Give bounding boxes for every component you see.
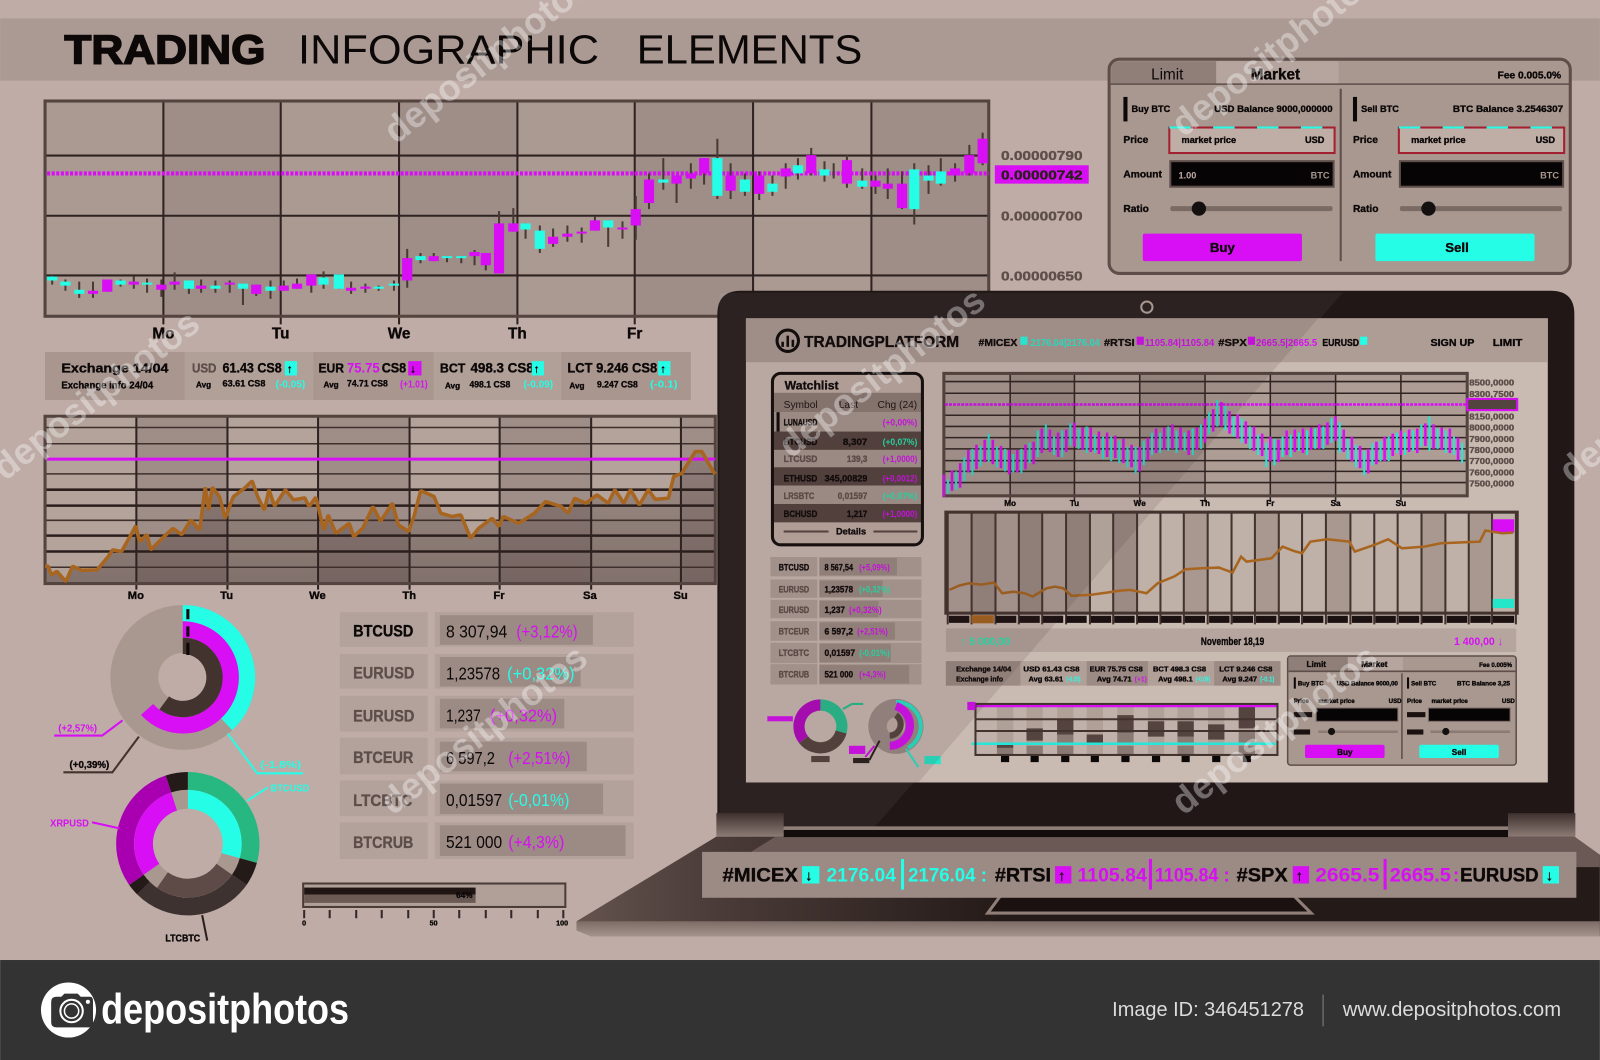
ticker band: 2176.04: [827, 864, 896, 886]
exchange info strip: BCT: [440, 360, 465, 375]
day labels: main chart: [152, 326, 642, 343]
mini trade panel: Buy BTC: [1298, 681, 1324, 688]
small info strip: Avg 498.1: [1158, 676, 1193, 684]
camera: [1141, 301, 1152, 313]
progress gauge: 100: [556, 919, 568, 927]
watchlist: (+0,07%): [883, 491, 917, 501]
screen ticker: [979, 337, 1523, 349]
watchlist: 8,307: [843, 437, 867, 447]
buy form: Buy: [1210, 240, 1236, 255]
row: EURUSD 2: 1,237: [446, 705, 481, 725]
watchlist: 139,3: [847, 454, 867, 464]
row: LTCBTC: (-0,01%): [508, 790, 569, 810]
day labels: area chart: We: [309, 590, 326, 602]
watchlist: ETHUSD: [784, 474, 818, 484]
watchlist: [772, 373, 922, 545]
small info strip: Avg 9.247: [1222, 676, 1257, 684]
screen chart axis: 7700,0000: [1469, 457, 1515, 466]
exchange info strip: ↑: [287, 363, 292, 375]
ticker band: EURUSD: [1460, 864, 1539, 886]
laptop lid: [717, 291, 1574, 828]
ticker band: ↓: [805, 868, 812, 884]
ticker band: 2665.5: [1390, 864, 1451, 886]
row: EURUSD: EURUSD: [353, 664, 415, 682]
ticker band: #RTSI: [995, 864, 1051, 886]
screen chart axis: 8500,0000: [1469, 379, 1515, 388]
sell form: market price: [1411, 135, 1466, 145]
small info strip: Exchange info: [956, 676, 1004, 684]
ticker band: #MICEX: [722, 864, 798, 886]
row: BTCRUB: 521 000: [446, 832, 502, 852]
platform logo: TRADINGPLATFORM: [804, 334, 959, 351]
screen ticker: #MICEX: [979, 338, 1018, 349]
ticker band: ↑: [1058, 868, 1065, 884]
watchlist: LRSBTC: [784, 491, 815, 501]
row: BTCEUR: BTCEUR: [353, 749, 414, 767]
screen chart axis: 7800,0000: [1469, 446, 1515, 455]
exchange info strip: Avg: [569, 382, 585, 391]
screen ticker: LIMIT: [1493, 338, 1523, 349]
day labels: main chart: Tu: [272, 326, 289, 343]
small info strip: (-0.09): [1196, 676, 1211, 684]
row: BTCEUR: (+2,51%): [508, 748, 570, 768]
row: BTCRUB: (+4,3%): [508, 832, 564, 852]
exchange info strip: [45, 352, 691, 400]
watchlist: 345,00829: [824, 474, 867, 484]
ticker band: ↑: [1296, 868, 1303, 884]
buy form: Price: [1123, 135, 1149, 146]
screen chart axis: [1467, 379, 1517, 489]
screen glare: [746, 318, 1318, 783]
ticker band: 2665.5: [1315, 864, 1380, 886]
watermarks: depositphotos: [373, 636, 595, 822]
screen chart axis: 8150,0000: [1469, 412, 1515, 421]
donut 2 labels: BTCUSD: [271, 784, 309, 795]
trade panel: [1109, 59, 1570, 273]
screen candlestick chart: Su: [1396, 499, 1406, 508]
footer: [0, 960, 1600, 1060]
footer logo: [41, 982, 349, 1038]
sell form: Price: [1353, 135, 1378, 146]
ticker band: :: [1223, 864, 1230, 886]
buy form: 1.00: [1178, 171, 1196, 181]
exchange info strip: 61.43 CS8: [223, 360, 282, 376]
screen ticker: SIGN UP: [1430, 338, 1475, 349]
tabs: Market: [1251, 67, 1300, 84]
sell form: Amount: [1353, 170, 1392, 181]
row: EURUSD 2: [340, 696, 634, 731]
laptop screen: [746, 318, 1548, 783]
exchange info strip: Avg: [324, 381, 339, 390]
ticker band: :: [981, 864, 987, 886]
exchange info strip: Avg: [196, 381, 211, 390]
mini price table: (+0,32%): [859, 585, 890, 595]
row: BTCRUB: BTCRUB: [353, 834, 414, 852]
mini trade panel: market price: [1432, 698, 1468, 705]
day labels: area chart: Su: [673, 590, 688, 602]
donut chart 1: [54, 605, 303, 773]
tabs: Fee 0.005.0%: [1498, 71, 1561, 82]
screen ticker: EURUSD: [1322, 338, 1359, 349]
ticker band: 1105.84: [1155, 864, 1218, 886]
mini price table: 6 597,2: [824, 627, 853, 637]
buy form: Amount: [1123, 170, 1162, 181]
exchange info strip: 63.61 CS8: [223, 379, 265, 389]
day labels: main chart: Mo: [152, 326, 174, 343]
screen chart axis: 7900,0000: [1469, 435, 1515, 444]
exchange info strip: 75.75: [347, 360, 380, 376]
mini trade panel: USD Balance 9000,00: [1337, 681, 1398, 688]
buy form: [1123, 97, 1335, 261]
watermarks: depositphotos: [1163, 636, 1385, 822]
sell form: USD: [1536, 135, 1555, 145]
mini trade panel: market price: [1318, 698, 1355, 705]
screen candlestick chart: Mo: [1004, 499, 1016, 508]
platform logo: [777, 330, 959, 351]
watchlist: 1,217: [847, 509, 867, 519]
title: [64, 26, 862, 72]
watchlist: (+1,0000): [883, 454, 917, 464]
row: EURUSD 2: EURUSD: [353, 707, 415, 725]
screen ticker: 1105.84|1105.84: [1145, 338, 1214, 349]
price axis labels: 0.00000650: [1001, 269, 1083, 284]
mini price table: 1,237: [824, 605, 845, 615]
exchange info strip: ↑: [534, 363, 539, 375]
screen candlestick chart: [944, 373, 1517, 508]
ticker band: [702, 852, 1576, 898]
buy form: Ratio: [1123, 204, 1149, 215]
price axis labels: 0.00000742: [1001, 168, 1083, 183]
watchlist: Watchlist: [785, 379, 839, 393]
image id: Image ID: 346451278: [1112, 999, 1304, 1021]
price table: [340, 612, 634, 859]
day labels: main chart: Fr: [627, 326, 642, 343]
mini price table: (-0,01%): [859, 648, 890, 658]
mini trade panel: Fee 0.005%: [1479, 662, 1513, 669]
small info strip: [946, 661, 1281, 686]
price axis labels: [995, 148, 1089, 284]
exchange info strip: (-0.09): [524, 380, 553, 391]
title: ELEMENTS: [637, 26, 862, 72]
small info strip: Avg 74.71: [1097, 676, 1132, 684]
screen chart axis: 7500,0000: [1469, 480, 1515, 489]
exchange info strip: Exchange info 24/04: [61, 381, 153, 392]
donut 2 labels: XRPUSD: [50, 818, 89, 829]
date strip: ↑ 5 000,00: [961, 636, 1010, 648]
screen chart axis: 7600,0000: [1469, 468, 1515, 477]
small info strip: (-0.1): [1260, 676, 1275, 684]
ticker band: #SPX: [1237, 864, 1288, 886]
buy form: BTC: [1311, 171, 1330, 181]
watermarks: depositphotos: [771, 279, 993, 465]
day labels: area chart: Mo: [128, 590, 144, 602]
mini trade panel: Market: [1361, 660, 1388, 669]
screen candlestick chart: Tu: [1070, 499, 1079, 508]
screen chart axis: 8000,0000: [1469, 424, 1515, 433]
laptop: [577, 291, 1600, 937]
watchlist: (+0,07%): [883, 437, 917, 447]
exchange info strip: LCT 9.246 CS8: [567, 360, 657, 376]
screen candlestick chart: Fr: [1266, 499, 1275, 508]
screen ticker: #SPX: [1218, 338, 1247, 349]
day labels: main chart: We: [388, 326, 410, 343]
row: BTCEUR: 6 597,2: [446, 748, 495, 768]
mini trade panel: Limit: [1306, 660, 1326, 669]
screen candlestick chart: We: [1134, 499, 1146, 508]
bezel shine: [719, 293, 1343, 828]
screen ticker: 2176.04|2176.04: [1031, 338, 1100, 349]
date strip: November 18,19: [1201, 636, 1264, 648]
donut 1 labels: (+0,39%): [70, 760, 109, 771]
site url: www.depositphotos.com: [1342, 999, 1561, 1021]
sell form: Sell BTC: [1361, 104, 1399, 114]
donut chart 2: [50, 781, 309, 945]
mini price table: [770, 557, 921, 685]
row: EURUSD: (+0,32%): [507, 663, 575, 683]
small info strip: USD 61.43 CS8: [1023, 665, 1080, 673]
watchlist: (+0,0012): [883, 474, 917, 484]
exchange info strip: ↑: [660, 363, 666, 375]
row: EURUSD: [340, 654, 634, 689]
mini trade panel: Sell: [1452, 748, 1466, 757]
watchlist: Chg (24): [878, 400, 917, 411]
donut 2 labels: LTCBTC: [165, 934, 201, 945]
small info strip: (-0.05): [1066, 676, 1081, 684]
watchlist: BTCUSD: [784, 437, 818, 447]
watchlist: Last: [839, 400, 858, 411]
exchange info strip: (+1.01): [400, 380, 428, 391]
row: BTCUSD: 8 307,94: [446, 622, 508, 642]
row: LTCBTC: LTCBTC: [353, 792, 413, 810]
exchange info strip: 74.71 CS8: [347, 379, 388, 389]
exchange info strip: EUR: [318, 360, 344, 375]
mini bar chart: [967, 702, 1277, 762]
mini trade panel: USD: [1389, 698, 1402, 705]
watchlist: LUNAUSD: [784, 417, 818, 427]
row: BTCUSD: (+3,12%): [516, 622, 578, 642]
price line: [45, 452, 715, 582]
footer logo: depositphotos: [101, 985, 349, 1033]
mini trade panel: Price: [1407, 698, 1423, 705]
mini price table: (+4,3%): [859, 669, 886, 679]
screen candlestick chart: Sa: [1331, 499, 1341, 508]
buy form: Buy BTC: [1132, 104, 1171, 114]
date labels: [949, 616, 1514, 623]
row: LTCBTC: 0,01597: [446, 790, 502, 810]
price axis labels: 0.00000700: [1001, 208, 1083, 223]
exchange info strip: (-0.05): [276, 380, 305, 391]
mini price table: (+5,09%): [859, 562, 890, 572]
sell form: Ratio: [1353, 204, 1378, 215]
mini price table: BTCUSD: [779, 562, 809, 572]
mini trade panel: Sell BTC: [1411, 681, 1437, 688]
mini price table: (+2,51%): [857, 627, 888, 637]
small info strip: (+1): [1135, 676, 1147, 684]
mini price table: 0,01597: [824, 648, 855, 658]
watchlist: (+0,00%): [883, 417, 917, 427]
exchange info strip: 9.247 CS8: [597, 380, 638, 390]
date strip: 1 400,00 ↓: [1454, 636, 1503, 648]
donut 1 tick marks: [186, 609, 189, 655]
mini price table: EURUSD: [779, 605, 809, 615]
row: BTCEUR: [340, 738, 634, 774]
title: TRADING: [64, 26, 265, 72]
day labels: area chart: Sa: [583, 590, 597, 602]
mini donut B: [849, 699, 941, 767]
row: EURUSD: 1,23578: [446, 663, 500, 683]
exchange info strip: ↓: [410, 363, 416, 375]
watermarks: [0, 0, 1600, 822]
small info strip: LCT 9.246 CS8: [1219, 665, 1272, 673]
mini price table: EURUSD: [779, 585, 809, 595]
title: INFOGRAPHIC: [298, 26, 599, 72]
mini price table: 8 567,54: [824, 562, 854, 572]
mini price table: BTCEUR: [779, 627, 809, 637]
area line chart: [45, 416, 715, 602]
ticker band: 2176.04: [908, 864, 976, 886]
day labels: main chart: Th: [508, 326, 527, 343]
screen ticker: 2665.5|2665.5: [1256, 338, 1318, 349]
exchange info strip: 498.1 CS8: [469, 380, 510, 390]
exchange info strip: USD: [192, 360, 217, 375]
buy form: market price: [1182, 135, 1236, 145]
mini trade panel: USD: [1502, 698, 1515, 705]
date strip: [946, 628, 1516, 652]
mini trade panel: Buy: [1337, 748, 1353, 757]
touchpad: [988, 890, 1311, 913]
progress gauge: [302, 884, 568, 927]
price axis labels: 0.00000790: [1001, 148, 1083, 163]
exchange info strip: Avg: [445, 382, 460, 391]
exchange info strip: CS8: [382, 360, 406, 376]
candlestick chart: main: [45, 101, 1089, 343]
watchlist: BCHUSD: [784, 509, 818, 519]
exchange info strip: Exchange 14/04: [61, 360, 169, 375]
hinges: [716, 813, 1575, 837]
watchlist: LTCUSD: [784, 454, 818, 464]
small info strip: EUR 75.75 CS8: [1090, 665, 1143, 673]
mini donut A: [767, 704, 863, 762]
ticker band: ↓: [1546, 868, 1553, 884]
ticker band: 1105.84: [1077, 864, 1147, 886]
progress gauge: 50: [430, 919, 438, 927]
progress gauge: 64%: [456, 891, 473, 900]
mini price table: 1,23578: [824, 585, 853, 595]
mini trade panel: BTC Balance 3,25: [1457, 681, 1511, 688]
day labels: area chart: Fr: [493, 590, 505, 602]
tabs: Limit: [1151, 67, 1184, 84]
title band: [0, 18, 1600, 81]
mini trade panel: [1288, 656, 1516, 765]
screen ticker: #RTSI: [1104, 338, 1135, 349]
ticker band: :: [1453, 864, 1459, 886]
sell form: BTC Balance 3.2546307: [1453, 104, 1563, 114]
day labels: area chart: Tu: [220, 590, 233, 602]
buy form: USD: [1305, 135, 1325, 145]
sell form: Sell: [1445, 240, 1469, 255]
row: BTCUSD: [340, 612, 634, 647]
mini trade panel: Price: [1294, 698, 1309, 705]
buy form: USD Balance 9000,000000: [1214, 104, 1333, 114]
watchlist: 0,01597: [838, 491, 867, 501]
screen chart axis: 8300,7500: [1469, 390, 1515, 399]
row: EURUSD 2: (+0,32%): [490, 705, 557, 725]
watchlist: Details: [836, 527, 866, 537]
small info strip: Avg 63.61: [1029, 676, 1063, 684]
small info strip: Exchange 14/04: [956, 665, 1011, 673]
row: LTCBTC: [340, 780, 634, 816]
donut 2 labels: [50, 784, 309, 945]
mini price table: (+0,32%): [849, 605, 882, 615]
mini price table: BTCRUB: [779, 669, 809, 679]
mini price table: LTCBTC: [779, 648, 809, 658]
exchange info strip: (-0.1): [650, 380, 678, 391]
sell form: BTC: [1540, 171, 1559, 181]
screen line chart: [946, 512, 1517, 624]
mini price table: 521 000: [824, 669, 853, 679]
donut 1 labels: (+2,57%): [58, 723, 97, 734]
sell form: [1353, 97, 1564, 261]
area fill: [45, 452, 715, 584]
screen candlestick chart: Th: [1200, 499, 1210, 508]
small info strip: BCT 498.3 CS8: [1153, 665, 1206, 673]
row: BTCRUB: [340, 822, 634, 859]
watchlist: (+1,0000): [883, 509, 917, 519]
day labels: area chart: Th: [402, 590, 416, 602]
exchange info strip: 498.3 CS8: [470, 360, 534, 376]
watchlist: Symbol: [784, 400, 818, 411]
laptop base: [577, 837, 1600, 937]
day labels: area chart: [128, 590, 688, 602]
tabs: [1110, 61, 1569, 84]
donut 1 labels: (-1,8%): [260, 760, 301, 771]
progress gauge: 0: [302, 919, 306, 927]
donut 1 labels: [54, 720, 303, 773]
row: BTCUSD: BTCUSD: [353, 623, 414, 641]
